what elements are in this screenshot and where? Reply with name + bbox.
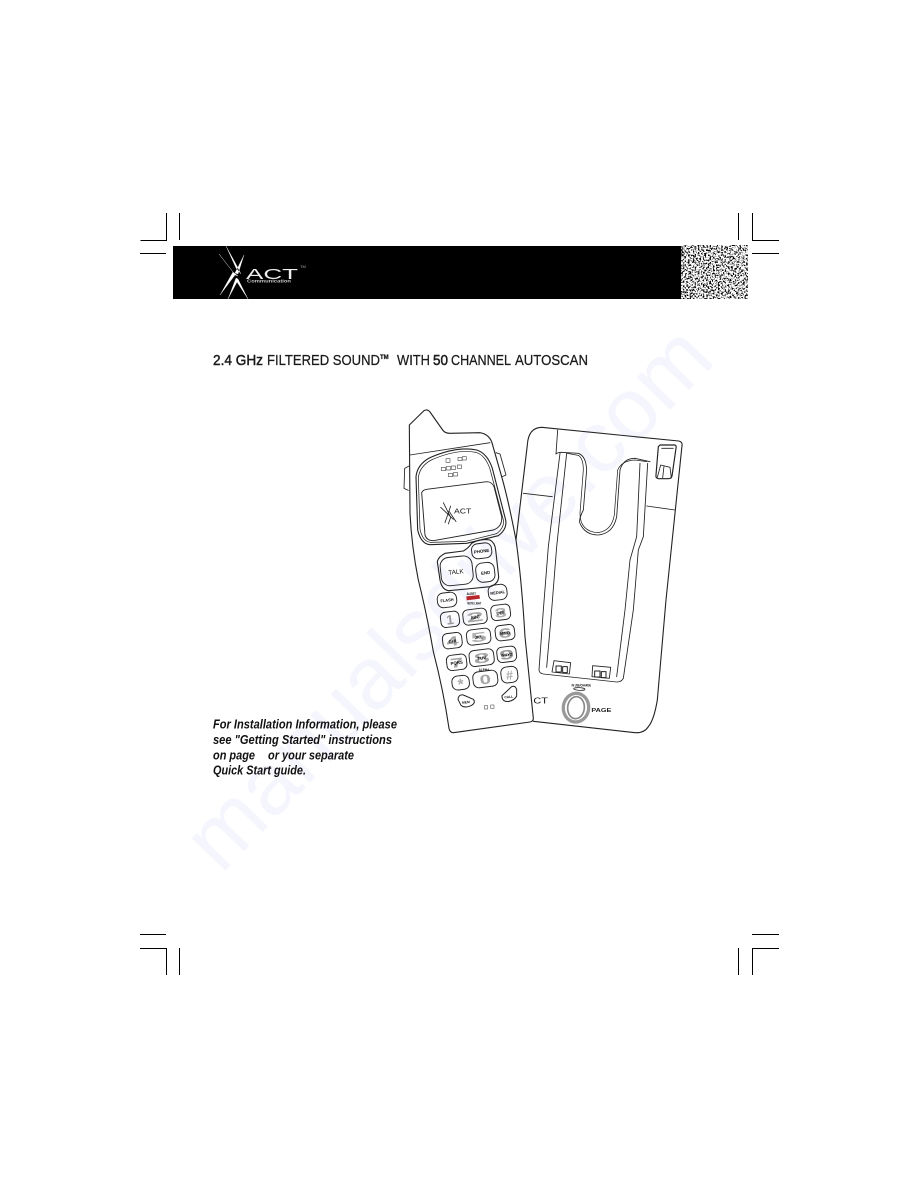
key star	[451, 675, 471, 694]
crop marks	[140, 213, 779, 975]
talk key	[439, 555, 474, 587]
header logo: Xact: Communication	[247, 278, 291, 284]
header band	[173, 246, 681, 299]
base seam lines	[523, 430, 675, 510]
heading: TM	[380, 355, 389, 361]
lcd screen	[422, 482, 502, 541]
key pound	[500, 666, 519, 684]
key 5 JKL	[466, 628, 492, 646]
heading: 50	[433, 353, 448, 369]
installation note: Quick Start guide.	[213, 763, 306, 778]
side button right	[496, 453, 506, 477]
in use indicator	[574, 687, 585, 691]
key 6 MNO: MNO	[500, 630, 511, 636]
installation note: For Installation Information, please	[213, 716, 397, 732]
heading	[213, 353, 588, 369]
key 9 WXYZ: 9	[499, 646, 515, 663]
key 3 DEF: 3	[494, 605, 508, 621]
phone key: PHONE	[474, 548, 490, 555]
handset illustration	[404, 410, 533, 733]
key 1: 1	[445, 612, 455, 628]
key 5 JKL: JKL	[474, 634, 483, 640]
memory key: MEM	[462, 700, 470, 705]
charging contact left	[552, 661, 571, 674]
belt clip inner line	[567, 453, 647, 533]
key 3 DEF	[490, 604, 511, 621]
flash key: FLASH	[440, 597, 454, 603]
key 9 WXYZ: WXYZ	[501, 652, 513, 658]
installation note: on page	[213, 748, 255, 762]
battery compartment	[539, 453, 648, 682]
alert and mute indicator	[466, 592, 481, 606]
key pound: #	[505, 668, 514, 683]
clip latch	[656, 445, 676, 479]
key 8 TUV: TUV	[477, 655, 486, 661]
charging contact right	[592, 666, 611, 678]
key 4 GHI: GHI	[448, 638, 457, 644]
end key: END	[481, 570, 490, 576]
printed brand on base: CT	[533, 697, 548, 706]
key 6 MNO: 6	[498, 625, 513, 641]
belt clip outer line	[556, 452, 650, 535]
call log key	[502, 686, 517, 702]
redial key: REDIAL	[490, 589, 506, 596]
key 4 GHI: 4	[446, 633, 460, 649]
key 4 GHI	[442, 632, 463, 650]
key 5 JKL: 5	[470, 629, 489, 646]
heading: 2.4 GHz	[213, 353, 263, 369]
key star: *	[457, 676, 465, 694]
key 2 ABC: ABC	[470, 614, 480, 620]
page button	[562, 692, 590, 723]
installation note: or your separate	[268, 748, 354, 762]
installation note	[213, 716, 397, 778]
key 7 PQRS: PQRS	[450, 660, 463, 666]
heading: WITH	[397, 353, 430, 369]
memory key	[458, 695, 474, 707]
battery compartment inner line	[547, 453, 640, 677]
redial key	[487, 584, 508, 601]
end key	[475, 562, 496, 583]
phone key	[471, 542, 493, 559]
key 2 ABC	[462, 608, 488, 626]
alert and mute indicator: ALERT	[467, 592, 476, 596]
in use label: IN USE/CHARGE	[572, 683, 591, 687]
header logo: Xact: ACT	[246, 266, 298, 283]
key 0: 0	[479, 671, 492, 688]
display frame	[416, 449, 506, 545]
page label: PAGE	[591, 708, 612, 714]
alpha label: ALPHA	[479, 668, 490, 672]
key 0	[472, 670, 499, 688]
key 7 PQRS: 7	[449, 655, 464, 671]
key 9 WXYZ	[496, 646, 517, 663]
alert and mute indicator: MUTE LIGHT	[467, 602, 481, 606]
base unit illustration	[516, 427, 682, 733]
side button left	[404, 466, 409, 490]
key 3 DEF: DEF	[496, 610, 506, 616]
installation note: see "Getting Started" instructions	[213, 732, 392, 747]
header noise texture block	[681, 245, 748, 299]
key 7 PQRS	[446, 654, 468, 671]
watermark: manualsdrive.com	[163, 306, 731, 888]
microphone holes	[484, 705, 494, 709]
speaker holes	[441, 457, 466, 477]
heading: CHANNEL	[451, 353, 511, 369]
heading: FILTERED SOUND	[267, 353, 380, 369]
flash key	[437, 592, 457, 608]
call log key: CALL	[504, 695, 513, 699]
key 1	[440, 611, 460, 628]
screen logo	[441, 503, 472, 524]
base outline	[516, 427, 682, 733]
heading: AUTOSCAN	[515, 353, 588, 369]
call key cluster	[437, 540, 499, 591]
header logo: Xact	[219, 246, 306, 299]
handset divider	[410, 443, 490, 455]
key 8 TUV: 8	[473, 649, 491, 667]
header logo: Xact: TM	[300, 264, 306, 269]
talk key: TALK	[448, 568, 465, 577]
handset outline	[409, 410, 533, 733]
key 2 ABC: 2	[466, 609, 485, 626]
key 6 MNO	[494, 624, 516, 642]
screen logo: ACT	[454, 506, 472, 515]
key 8 TUV	[468, 648, 495, 667]
